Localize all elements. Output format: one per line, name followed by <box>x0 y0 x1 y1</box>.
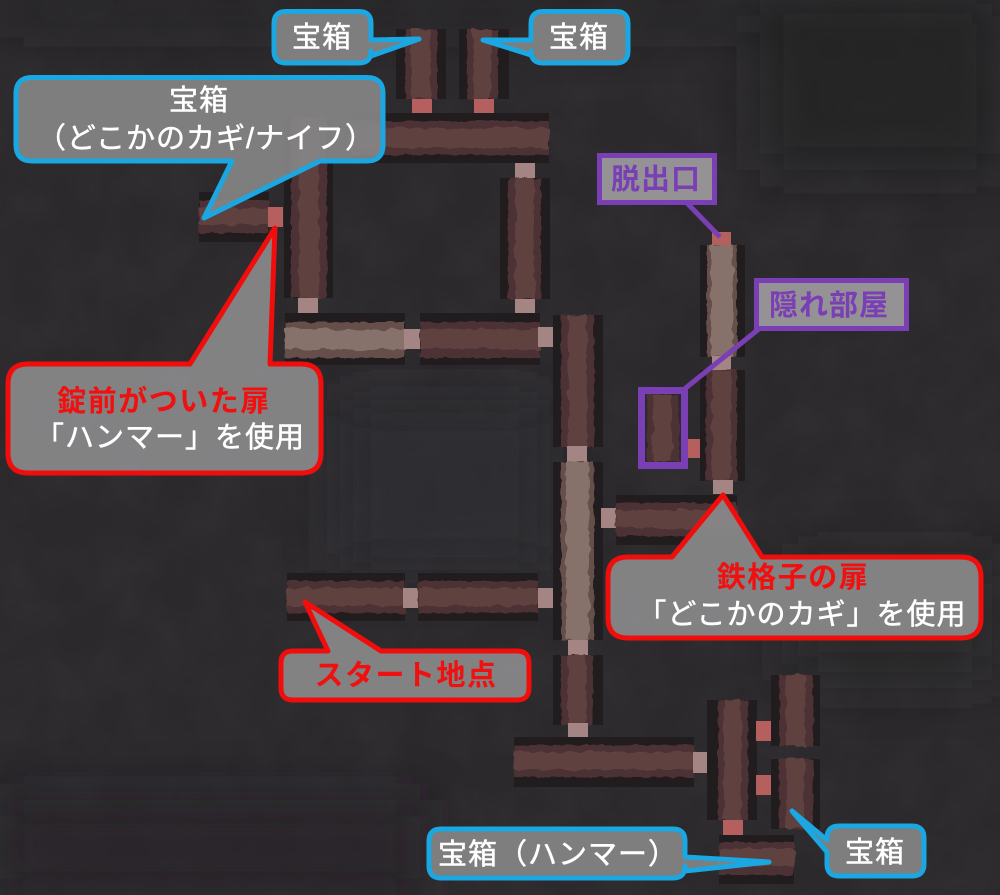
room: small chest left <box>199 192 269 242</box>
room: hidden room <box>647 395 679 461</box>
room: top chest right <box>459 29 509 99</box>
callout: start point: スタート地点 <box>314 659 498 692</box>
door: between exit rooms <box>712 356 731 370</box>
door: pale corridor right <box>404 329 420 349</box>
door: start left right <box>403 588 418 608</box>
door: to top right room <box>756 721 772 741</box>
callout: treasure top right: 宝箱 <box>549 21 609 54</box>
callout: locked door: 錠前がついた扉 <box>57 384 271 418</box>
callout: treasure key or knife: 宝箱 <box>169 84 229 117</box>
room: centre upper vertical <box>553 315 603 447</box>
label: exit: 脱出口 <box>611 163 701 196</box>
map of rooms and doors <box>199 29 820 884</box>
label: hidden room <box>642 280 906 466</box>
callout: iron gate: 「どこかのカギ」を使用 <box>637 598 967 631</box>
room: corridor second <box>420 313 540 365</box>
door: corridor second right <box>538 327 553 347</box>
callout: treasure top right <box>483 12 628 63</box>
callout: treasure hammer <box>429 829 769 878</box>
room: lower right vertical <box>707 700 757 820</box>
room: lower corridor <box>514 737 694 787</box>
door: top chest right <box>474 99 494 114</box>
door: centre upper bottom <box>567 446 587 462</box>
callout: locked door <box>8 228 321 473</box>
room: start right <box>418 573 538 621</box>
room: pale corridor <box>285 313 405 365</box>
callout: treasure key or knife: （どこかのカギ/ナイフ） <box>37 123 375 155</box>
door: top corridor right <box>515 163 535 178</box>
door: lower corridor right <box>693 752 708 773</box>
room: iron gate corridor <box>616 495 737 545</box>
room: top chest left <box>396 29 446 99</box>
room: upper right vertical <box>500 178 550 299</box>
door: to bottom room <box>723 820 743 836</box>
label: exit <box>600 156 720 237</box>
door: locked door <box>268 207 283 227</box>
door: iron gate <box>713 480 733 494</box>
callout: treasure lower right <box>792 811 924 876</box>
door: upper left vertical bottom <box>298 298 318 313</box>
callout: iron gate: 鉄格子の扉 <box>717 561 869 594</box>
callout: treasure top left <box>274 12 419 63</box>
room: centre pale vertical <box>553 462 603 640</box>
room: top corridor <box>350 113 549 163</box>
room: lower exit vertical <box>700 370 745 481</box>
door: centre lower bottom <box>568 723 588 739</box>
door: to start column <box>601 508 616 528</box>
room: upper left vertical <box>284 117 333 298</box>
label: hidden room: 隠れ部屋 <box>769 289 889 322</box>
room: centre lower vertical <box>553 655 603 725</box>
callout: treasure hammer: 宝箱（ハンマー） <box>438 838 678 871</box>
callout: locked door: 「ハンマー」を使用 <box>35 421 305 454</box>
door: to lower right room <box>756 775 772 795</box>
room: bottom chest <box>719 835 794 884</box>
room: top right small <box>771 675 820 746</box>
room: lower right small <box>771 759 820 829</box>
callout: treasure top left: 宝箱 <box>292 21 352 54</box>
callout: treasure lower right: 宝箱 <box>845 836 905 869</box>
door: upper right vertical bottom <box>515 299 535 313</box>
door: exit <box>712 232 731 245</box>
room: start left <box>287 573 405 621</box>
callout: treasure key or knife <box>16 78 383 218</box>
door: centre pale bottom <box>568 640 588 655</box>
room: exit pale vertical <box>700 245 745 357</box>
door: start right right <box>538 588 553 608</box>
callout: start point <box>281 602 529 700</box>
door: hidden room <box>687 439 700 458</box>
door: top chest left <box>412 99 432 114</box>
callout: iron gate <box>608 495 981 638</box>
